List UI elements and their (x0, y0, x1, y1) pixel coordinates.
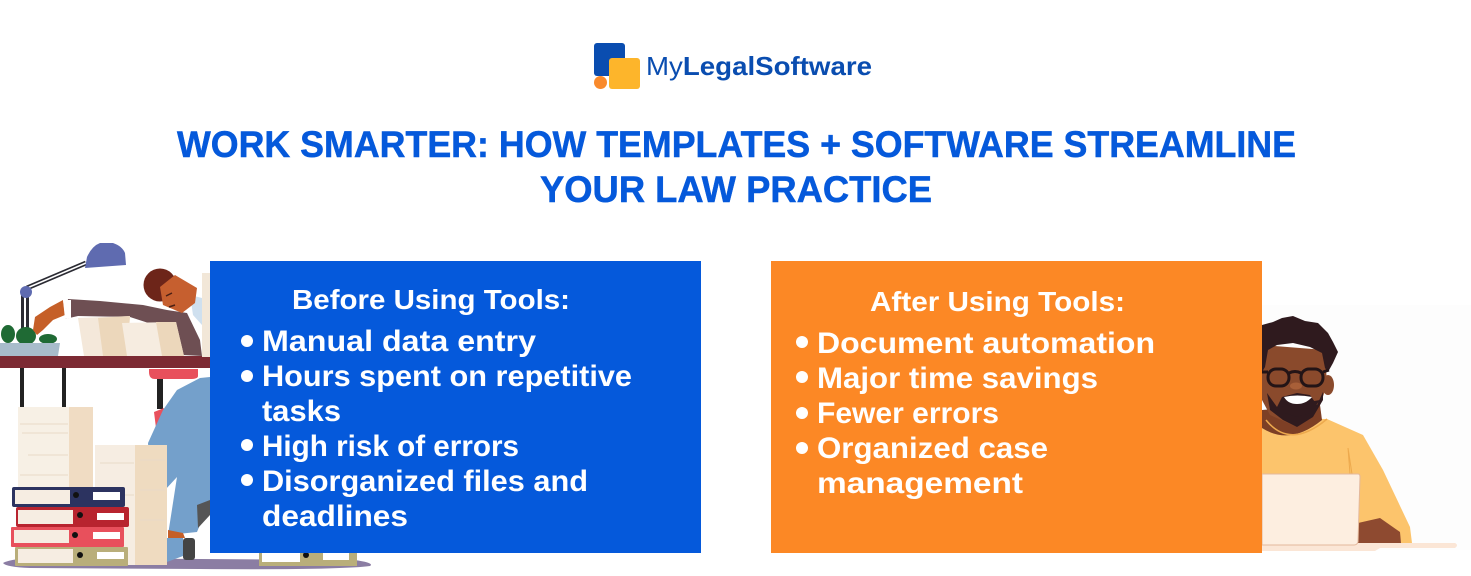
bullet list: after (796, 327, 1155, 500)
bullet list: after: Organized case (817, 432, 1048, 465)
bullet list: before: tasks (262, 395, 341, 428)
forearm (1358, 518, 1401, 543)
title: YOUR LAW PRACTICE (540, 169, 932, 210)
desk papers (78, 316, 184, 356)
title (177, 124, 1296, 210)
bullet list: after: Major time savings (817, 362, 1098, 395)
bullet list: after: management (817, 467, 1023, 500)
head (1262, 345, 1327, 427)
bullet list: before: Manual data entry (262, 325, 536, 358)
shirt (1262, 418, 1412, 543)
panel heading: before: Before Using Tools: (292, 284, 570, 315)
plants and planter (0, 325, 60, 356)
illustration: smiling worker at laptop (1262, 305, 1471, 551)
desk (0, 356, 210, 407)
legs (148, 377, 210, 535)
bullet list: before: Disorganized files and (262, 465, 588, 498)
beard (1267, 392, 1323, 427)
binders (11, 487, 357, 566)
shoe (168, 530, 185, 538)
bullet list: after: Document automation (817, 327, 1155, 360)
smile (1284, 396, 1312, 404)
panel: after using tools (771, 261, 1262, 553)
floor shadow (3, 558, 371, 569)
back paper and shirt (202, 273, 210, 357)
illustration: overwhelmed worker at desk (0, 243, 371, 569)
bullet list: before: High risk of errors (262, 430, 519, 463)
chair (149, 369, 198, 379)
desk lamp (20, 243, 126, 345)
title: WORK SMARTER: HOW TEMPLATES + SOFTWARE STREAMLINE (177, 124, 1296, 165)
logo wordmark: MyLegalSoftware (646, 51, 872, 81)
backdrop (1262, 305, 1471, 550)
hair (144, 268, 176, 302)
glasses (1262, 369, 1329, 386)
table (1262, 543, 1457, 551)
nose (1290, 382, 1302, 390)
panel: before using tools (210, 261, 701, 553)
bullet list: after: Fewer errors (817, 397, 999, 430)
paper stacks (18, 407, 167, 565)
logo (594, 43, 872, 89)
hand (33, 300, 65, 335)
neck (1262, 405, 1322, 435)
head (160, 275, 197, 313)
ear (1322, 375, 1334, 395)
worker (33, 268, 210, 562)
hair (1262, 316, 1338, 372)
bullet list: before: deadlines (262, 500, 408, 533)
bullet list: before (241, 325, 632, 533)
bullet list: before: Hours spent on repetitive (262, 360, 632, 393)
panel heading: after: After Using Tools: (870, 286, 1125, 317)
logo icon (594, 43, 640, 89)
laptop (1262, 474, 1360, 545)
arm and torso (65, 299, 202, 356)
